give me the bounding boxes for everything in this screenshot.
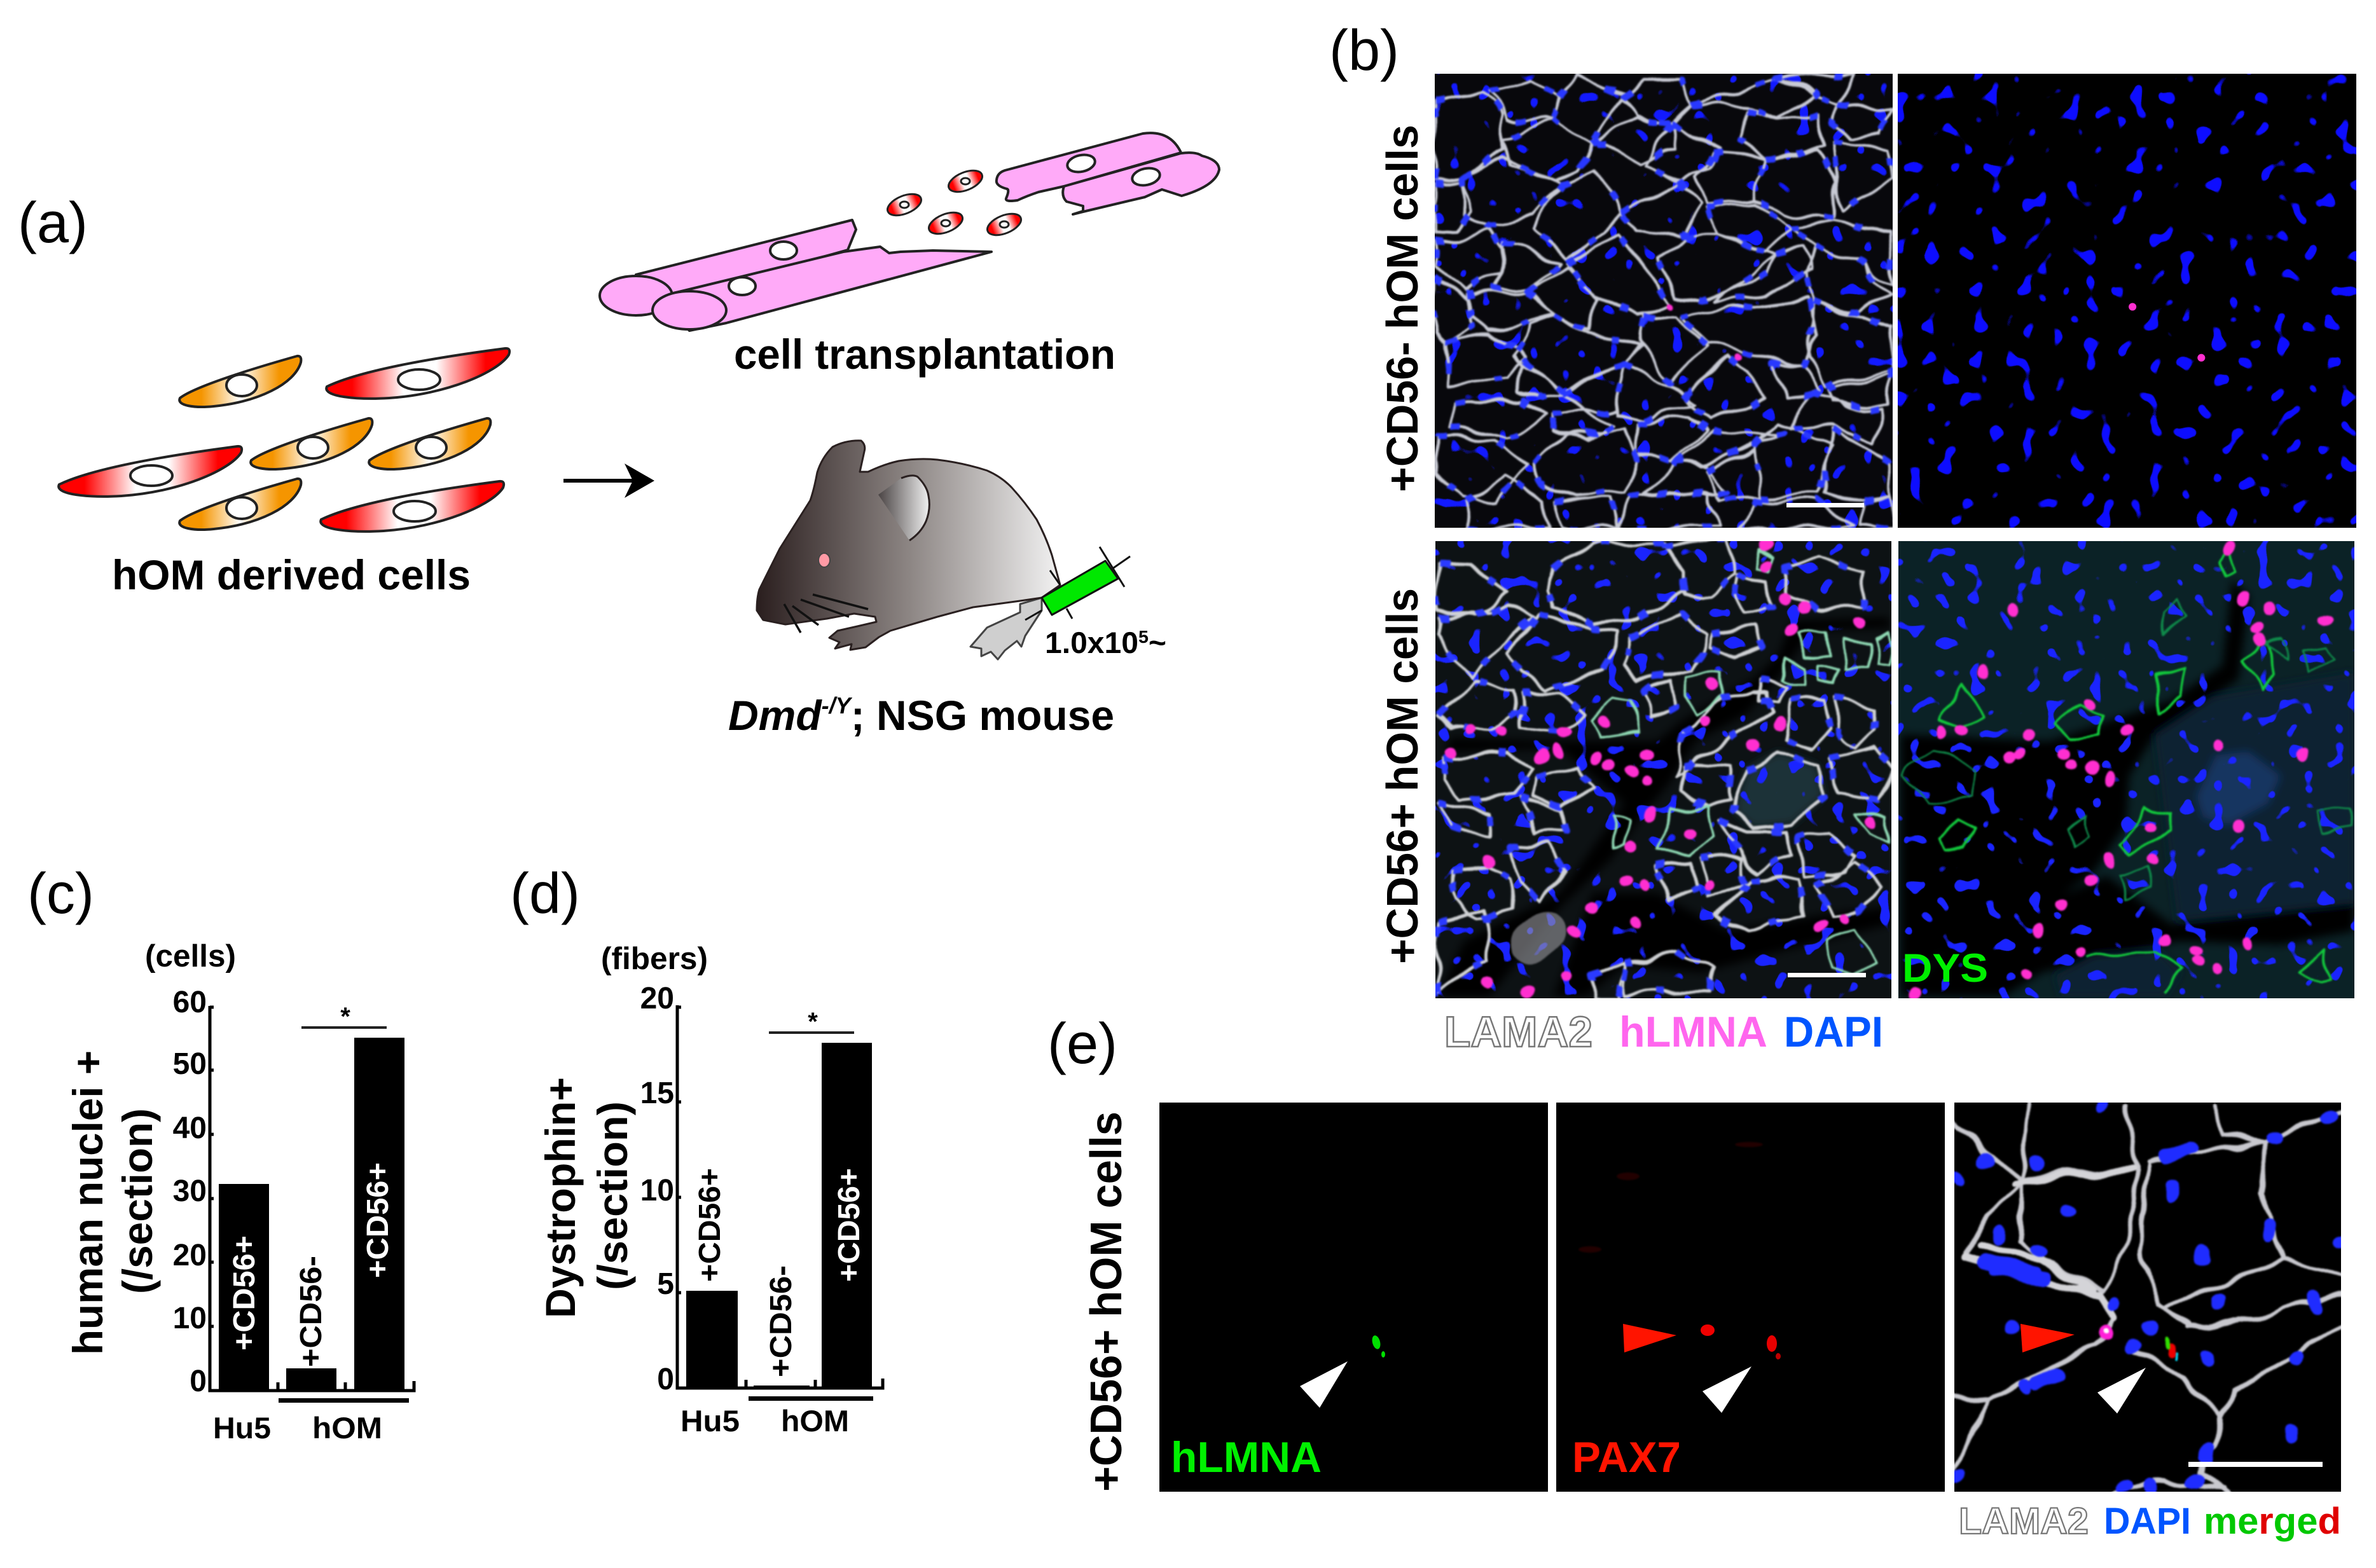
row label: CD56-: +CD56- hOM cells [1378, 125, 1427, 492]
significance marker: * [808, 1008, 818, 1036]
bar labels: +CD56+ [228, 1235, 261, 1351]
y axis numbers: 10 [640, 1174, 674, 1207]
scale bar [1786, 503, 1864, 507]
panel d: dystrophin bar chart [510, 862, 883, 1438]
bar labels [693, 1168, 866, 1377]
y axis numbers: 50 [173, 1047, 207, 1081]
y axis title: (/section) [114, 1108, 161, 1294]
panel label (a): (a) [18, 191, 88, 255]
channel label DYS: DYS [1902, 946, 1988, 991]
arrowhead: red [1623, 1324, 1676, 1352]
y axis title [64, 1050, 161, 1355]
dose label: 5 [1138, 627, 1149, 647]
y axis numbers [173, 986, 207, 1398]
legend: LAMA2 hLMNA DAPI [1444, 1008, 1883, 1056]
bar labels: +CD56+ [361, 1162, 395, 1278]
bar labels [228, 1162, 395, 1367]
bar labels: +CD56+ [693, 1168, 727, 1282]
hOM group line [279, 1398, 409, 1403]
y axis title: human nuclei + [64, 1050, 111, 1355]
micrograph: merged [1954, 1103, 2342, 1492]
hOM group line [749, 1396, 873, 1401]
icon: mouse with syringe [757, 441, 1130, 659]
y axis numbers: 60 [173, 986, 207, 1019]
bar labels: +CD56+ [832, 1168, 866, 1282]
y axis title: Dystrophin+ [537, 1077, 584, 1318]
row label: CD56+: +CD56+ hOM cells [1378, 588, 1427, 964]
y axis title [537, 1077, 636, 1318]
panel label (e): (e) [1047, 1012, 1117, 1076]
y axis numbers [640, 982, 674, 1396]
y axis numbers: 0 [657, 1363, 674, 1396]
channel label PAX7: PAX7 [1572, 1433, 1681, 1482]
scale bar [2188, 1462, 2323, 1467]
panel label (b): (b) [1329, 19, 1399, 83]
hOM derived cells illustration [59, 348, 509, 532]
bar labels: +CD56- [764, 1265, 798, 1377]
arrowhead: white [2097, 1368, 2146, 1413]
y axis numbers: 20 [640, 982, 674, 1015]
micrograph: CD56+ LAMA2 hLMNA DAPI [1435, 541, 1891, 998]
legend: LAMA2 DAPI merged: LAMA2 [1959, 1501, 2089, 1542]
axes [677, 1005, 883, 1388]
arrowhead: white [1300, 1361, 1348, 1408]
group labels [680, 1404, 849, 1438]
significance marker [301, 1003, 387, 1031]
legend: LAMA2 hLMNA DAPI: hLMNA [1619, 1008, 1767, 1056]
y axis numbers: 10 [173, 1302, 207, 1335]
y axis numbers: 0 [190, 1365, 207, 1398]
scale bar [1788, 973, 1866, 977]
group labels: Hu5 [680, 1404, 740, 1438]
arrowhead: red [2020, 1324, 2075, 1352]
micrograph: CD56- LAMA2 hLMNA DAPI [1435, 74, 1893, 528]
caption: Dmd mouse: ; NSG mouse [851, 692, 1114, 739]
bar labels: +CD56- [294, 1256, 328, 1367]
caption: Dmd mouse: Dmd [728, 692, 822, 739]
unit label: (cells) [145, 939, 236, 973]
dose label: ~ [1149, 626, 1166, 659]
y axis numbers: 15 [640, 1076, 674, 1110]
y axis numbers: 30 [173, 1174, 207, 1208]
bars [219, 1038, 404, 1391]
arrowhead: white [1703, 1366, 1751, 1413]
group labels: hOM [781, 1404, 849, 1438]
panel b: immunostaining [1329, 19, 2356, 1056]
row label: +CD56+ hOM cells [1081, 1111, 1131, 1492]
dose label: 1.0x10 [1045, 626, 1136, 659]
legend: LAMA2 DAPI merged: merged [2204, 1501, 2341, 1542]
y axis numbers: 40 [173, 1111, 207, 1145]
y axis numbers: 20 [173, 1239, 207, 1272]
unit label: (fibers) [601, 942, 708, 976]
legend: LAMA2 DAPI merged [1959, 1501, 2341, 1542]
group labels: hOM [312, 1411, 382, 1445]
y axis numbers: 5 [657, 1267, 674, 1301]
muscle fibers broken bundle right [997, 133, 1219, 214]
group labels [213, 1411, 382, 1445]
group labels: Hu5 [213, 1411, 271, 1445]
arrow [563, 464, 654, 498]
panel e: satellite cell staining [1047, 1012, 2342, 1542]
legend: LAMA2 DAPI merged: DAPI [2104, 1501, 2191, 1542]
muscle fibers broken bundle left [600, 220, 991, 331]
micrograph: hLMNA [1159, 1103, 1548, 1492]
panel a: transplantation schematic [18, 133, 1219, 739]
significance marker: * [340, 1003, 350, 1031]
small transplanted cells [885, 167, 1024, 239]
panel c: human nuclei bar chart [27, 862, 414, 1445]
y axis title: (/section) [589, 1101, 636, 1290]
micrograph: CD56+ DYS [1898, 541, 2354, 998]
caption: Dmd mouse: -/Y [822, 692, 853, 719]
channel label hLMNA: hLMNA [1171, 1433, 1322, 1482]
micrograph: CD56- nuclei [1898, 74, 2356, 528]
panel label (c): (c) [27, 862, 94, 926]
caption: cell transplantation: cell transplantation [734, 331, 1115, 378]
axes [210, 1006, 414, 1391]
legend: LAMA2 hLMNA DAPI: DAPI [1784, 1008, 1883, 1056]
panel label (d): (d) [510, 862, 580, 926]
micrograph: PAX7 [1556, 1103, 1945, 1492]
significance marker [769, 1008, 854, 1036]
bars [686, 1043, 872, 1388]
caption: hOM derived cells: hOM derived cells [112, 551, 471, 598]
legend: LAMA2 hLMNA DAPI: LAMA2 [1444, 1008, 1592, 1056]
